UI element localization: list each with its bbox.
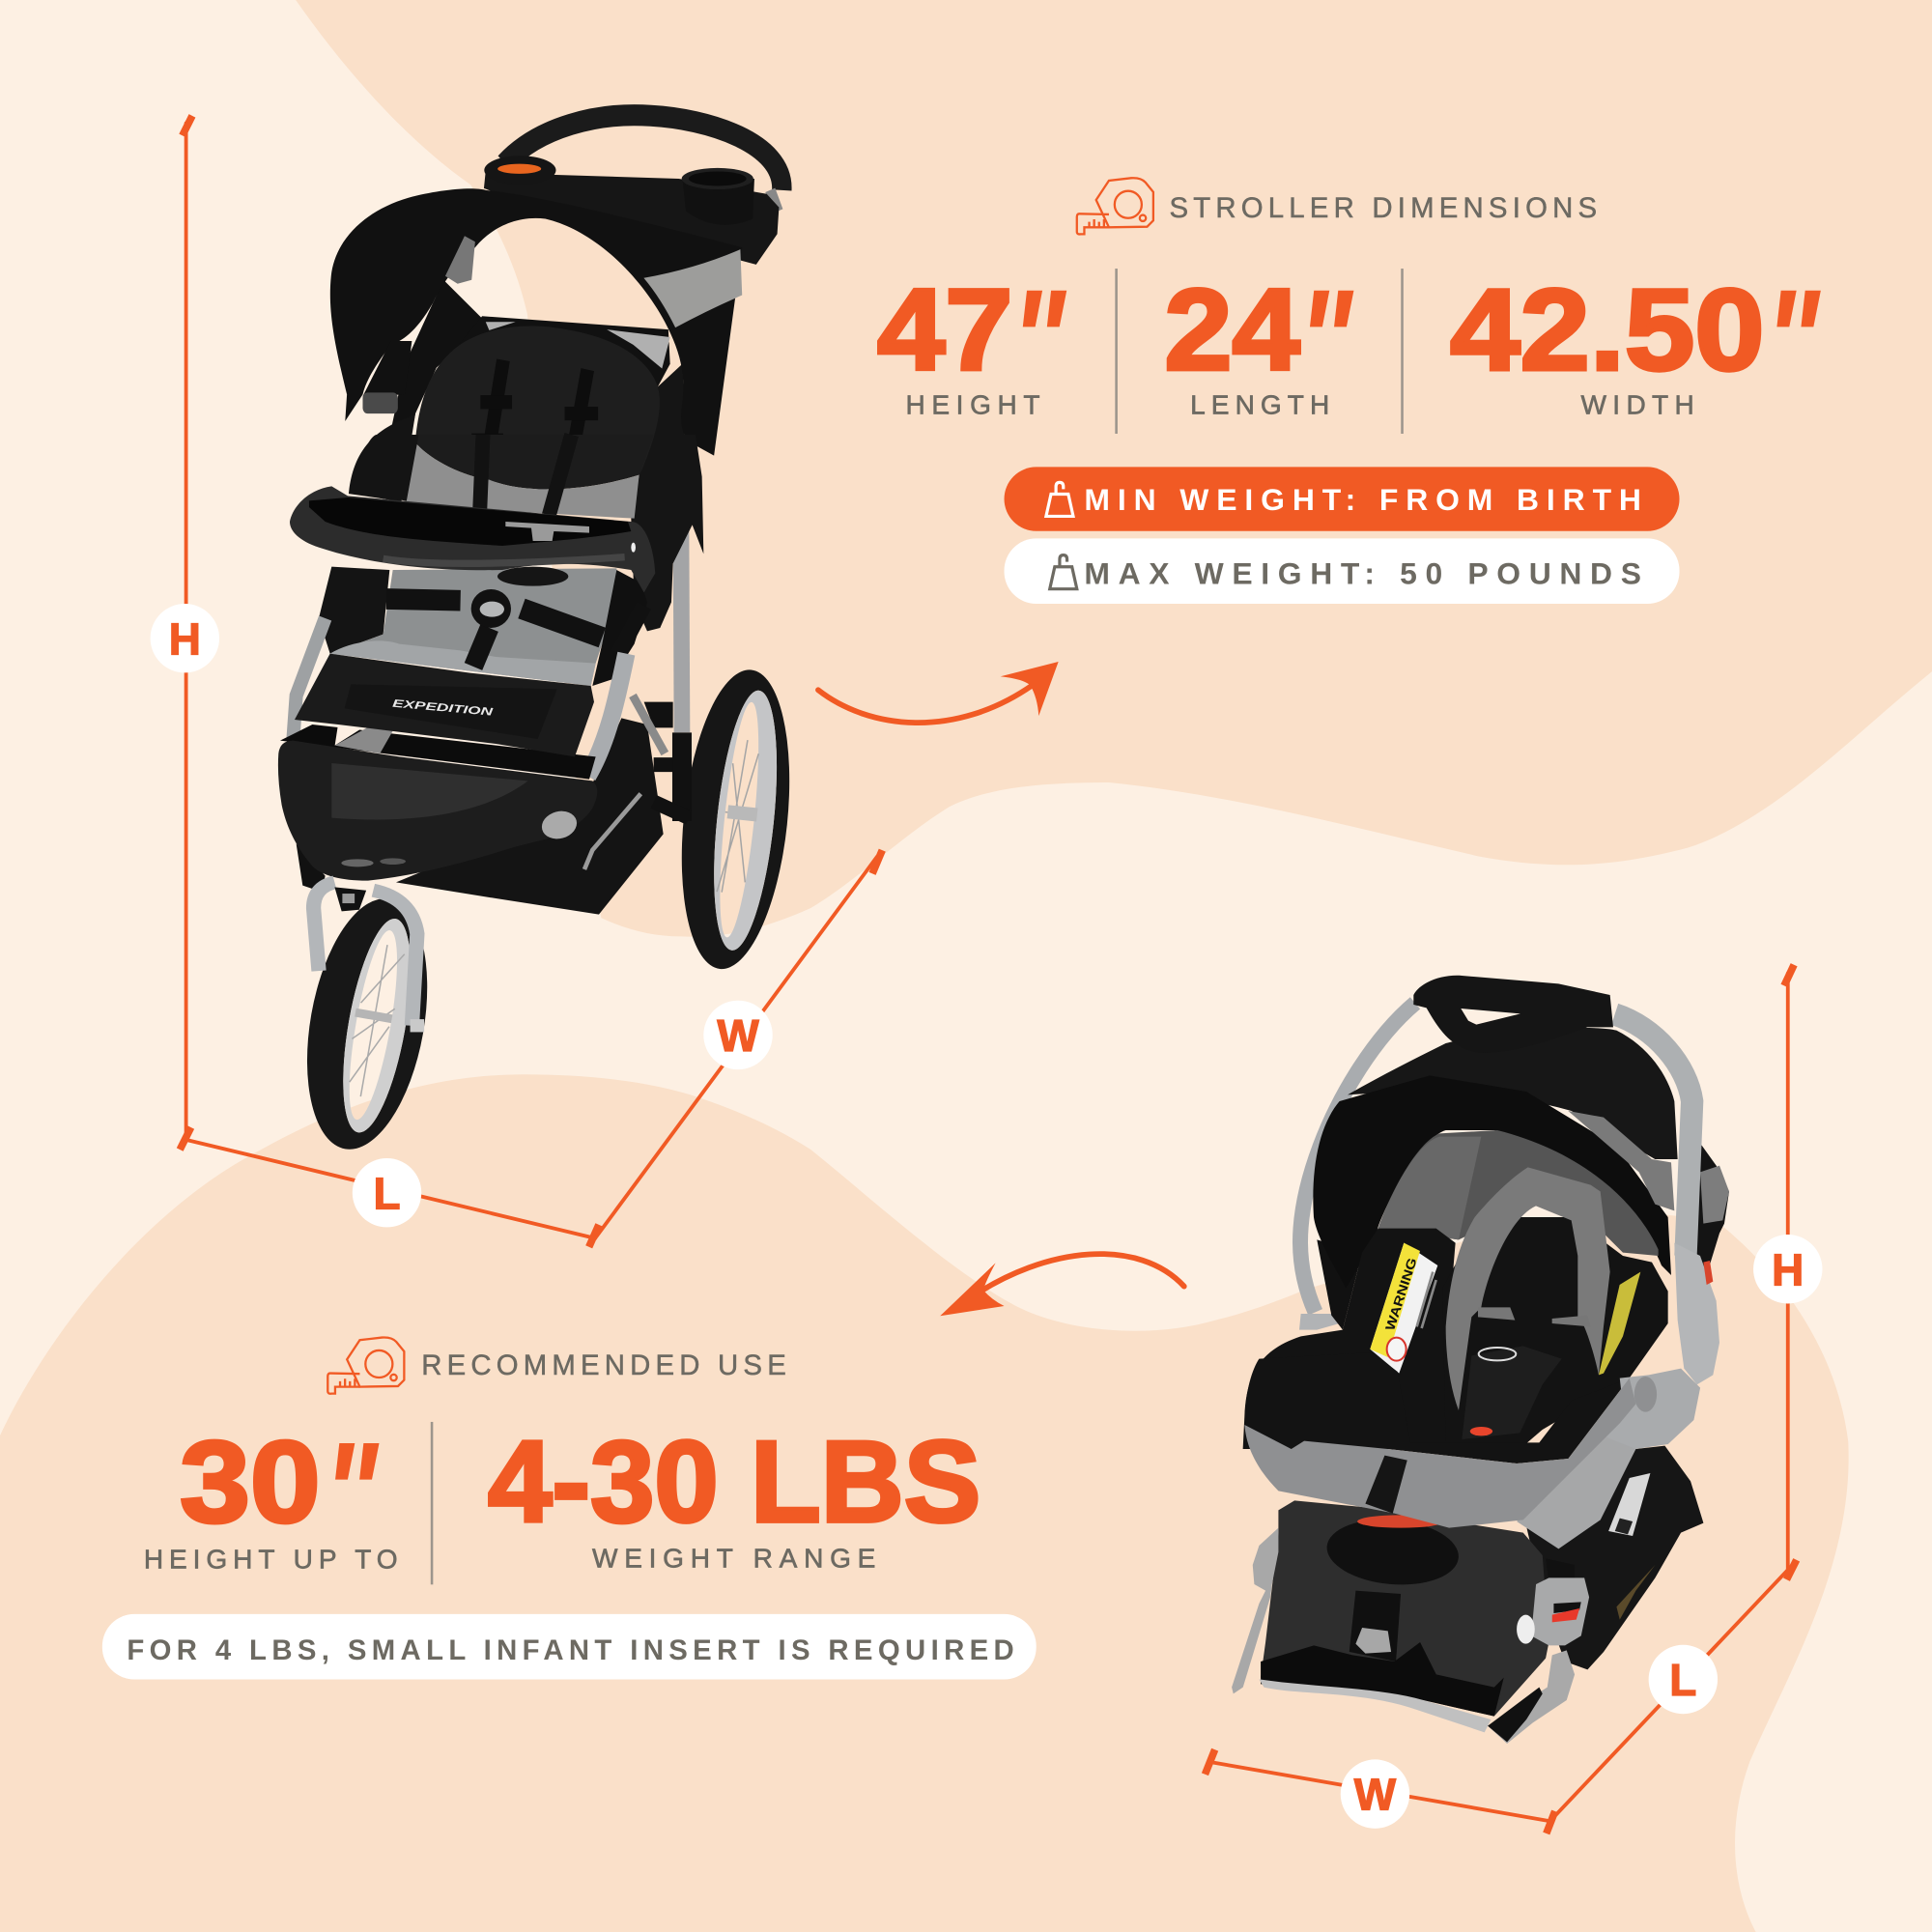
rear base (1526, 1446, 1703, 1669)
pill: infant insert note: FOR 4 LBS, SMALL INFANT INSERT IS REQUIRED (127, 1634, 1014, 1666)
stat: length: LENGTH (1190, 390, 1329, 420)
stat: height (877, 260, 1067, 421)
canopy side mesh (1568, 1111, 1674, 1210)
frame tubes (293, 618, 326, 741)
arrow: car seat to recommended use (940, 1254, 1184, 1316)
seat back (437, 316, 670, 386)
height line (185, 124, 187, 1140)
release button recess (1350, 1591, 1401, 1662)
rim strap (1365, 1456, 1407, 1514)
stroller photo illustration (278, 115, 803, 1159)
seat base (319, 567, 389, 654)
harness clip (1462, 1346, 1562, 1439)
left connector (1232, 1528, 1278, 1693)
H badge: H (1772, 1244, 1804, 1294)
right warning label (1599, 1272, 1640, 1375)
front fork (314, 882, 424, 1032)
brand name: EXPEDITION (392, 698, 495, 719)
canopy (330, 188, 742, 456)
canopy interior (1313, 1075, 1671, 1288)
pill: maximum weight: MAX WEIGHT: 50 POUNDS (1084, 556, 1641, 591)
parent tray (484, 171, 779, 265)
stat: height up to: " (323, 1412, 380, 1575)
pill: infant insert note (102, 1614, 1037, 1680)
icon: tape measure, recommended use heading (327, 1337, 404, 1394)
front bumper (297, 843, 326, 892)
car seat dimension lines (1205, 965, 1822, 1833)
stat: length (1164, 260, 1354, 421)
stat: weight range: WEIGHT RANGE (592, 1543, 875, 1573)
waist buckle (386, 589, 602, 667)
L badge: L (1669, 1655, 1696, 1705)
stat: height up to (144, 1412, 398, 1575)
side arm (1604, 1369, 1700, 1449)
width line (1210, 1762, 1550, 1821)
shoulder straps (489, 360, 587, 448)
warning label (1370, 1243, 1437, 1374)
seat frame (377, 280, 486, 501)
cushion (1243, 1229, 1488, 1449)
footrest panel (295, 654, 594, 756)
child tray (290, 486, 655, 592)
grey rim (1244, 1378, 1635, 1528)
rear leg (644, 702, 673, 727)
W badge: W (717, 1010, 759, 1061)
stat: width (1450, 260, 1822, 421)
W badge (1341, 1759, 1409, 1829)
rear wheel (668, 665, 803, 975)
W badge (703, 1001, 773, 1069)
metal latch (1488, 1650, 1575, 1744)
car seat base (1232, 1420, 1703, 1744)
icon: weight (1050, 555, 1077, 589)
stat: width: WIDTH (1580, 390, 1694, 420)
stat: height up to: 30 (180, 1417, 321, 1547)
pill: minimum weight (1005, 467, 1680, 531)
height line (1786, 974, 1789, 1575)
left carry handle (1300, 1003, 1415, 1312)
background wave: top peach (296, 0, 1932, 937)
stat: weight range: 4-30 LBS (488, 1417, 980, 1547)
arrow: stroller to dimensions (818, 662, 1059, 723)
stat: height: 47 (877, 266, 1012, 395)
back fabric (1688, 1143, 1729, 1275)
pill: minimum weight: MIN WEIGHT: FROM BIRTH (1084, 482, 1641, 517)
right carry handle (1615, 1014, 1692, 1256)
seat well (1244, 1352, 1630, 1463)
stat: length: 24 (1164, 266, 1300, 395)
icon: tape measure, stroller heading (1077, 178, 1153, 234)
background wave: bottom peach (0, 1074, 1849, 1932)
stroller upper body (330, 115, 781, 501)
instruction sticker (1608, 1473, 1650, 1536)
stroller dimension lines (151, 116, 882, 1247)
width line (595, 856, 877, 1238)
car seat shell (1243, 976, 1729, 1449)
stat divider (1115, 269, 1118, 434)
base foot (1261, 1642, 1504, 1717)
stat: height: HEIGHT (906, 390, 1040, 420)
H badge: H (169, 613, 201, 664)
canopy top (1348, 1028, 1678, 1159)
shell underside (1517, 1420, 1635, 1548)
lower seat back (417, 435, 654, 489)
W badge: W (1354, 1770, 1397, 1820)
infant car seat photo illustration (1232, 976, 1729, 1744)
under-panel shadow (280, 724, 596, 780)
front wheel (290, 889, 445, 1159)
icon: weight (1046, 482, 1073, 516)
stroller middle body (278, 435, 703, 915)
L badge (1649, 1645, 1718, 1714)
pill: maximum weight (1005, 538, 1680, 604)
heading: recommended use: RECOMMENDED USE (421, 1350, 786, 1381)
stat divider (1401, 269, 1404, 434)
seat back padding (1378, 1130, 1659, 1256)
stat: length: " (1297, 260, 1354, 421)
L badge: L (373, 1168, 401, 1218)
warning label: WARNING (1382, 1256, 1420, 1332)
seat side frame (351, 435, 418, 502)
stat: width: 42.50 (1450, 266, 1765, 395)
handlebar (505, 115, 781, 190)
handle grip (1413, 976, 1613, 1053)
stat: height up to: HEIGHT UP TO (144, 1545, 398, 1575)
length line (1550, 1567, 1790, 1821)
car seat rim (1244, 1352, 1700, 1528)
length line (186, 1140, 595, 1238)
stat: width: " (1765, 260, 1822, 421)
heading: stroller dimensions: STROLLER DIMENSIONS (1169, 192, 1597, 224)
stat: height: " (1010, 260, 1067, 421)
head support (1446, 1167, 1610, 1410)
belt lock (1517, 1558, 1589, 1645)
front base (1261, 1500, 1548, 1717)
storage basket (396, 718, 664, 915)
H badge (151, 604, 219, 672)
L badge (353, 1158, 421, 1227)
stat divider (431, 1422, 433, 1584)
H badge (1753, 1235, 1822, 1303)
